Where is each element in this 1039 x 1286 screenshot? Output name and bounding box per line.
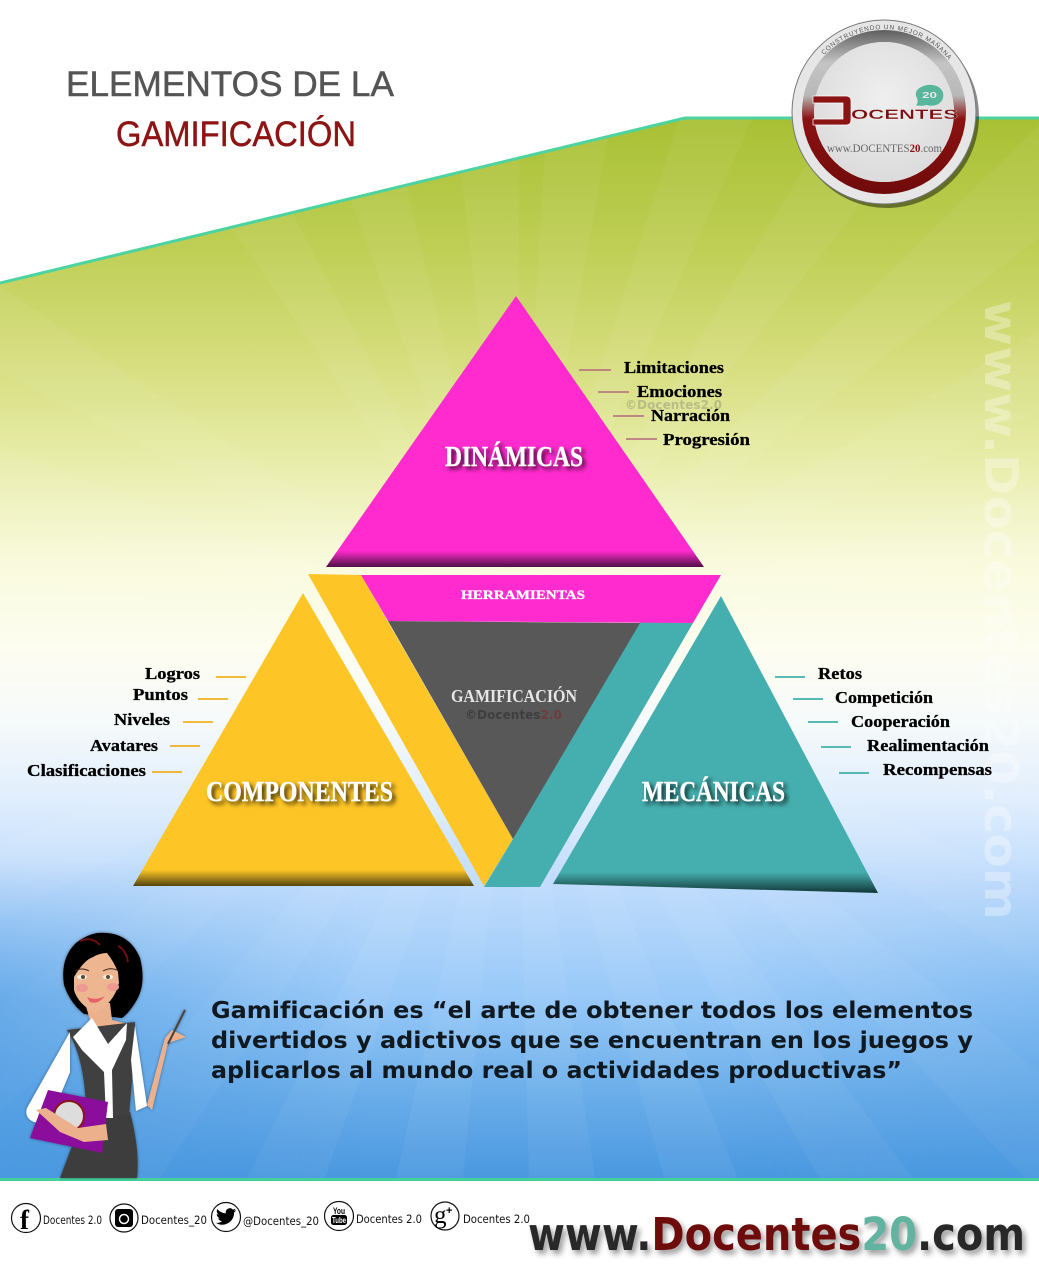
dinámicas list: ©Docentes2.0 — [625, 398, 722, 412]
social: youtube — [324, 1202, 422, 1230]
social: youtube: Tube — [332, 1216, 346, 1225]
social: twitter: @Docentes_20 — [243, 1214, 319, 1228]
social: google plus — [431, 1202, 530, 1230]
componentes list: Clasificaciones — [27, 761, 146, 780]
mecánicas list: Realimentación — [867, 736, 990, 755]
dinámicas list: Progresión — [663, 430, 751, 449]
dinámicas list — [579, 358, 751, 449]
social: instagram — [110, 1204, 207, 1232]
quote text: Gamificación es “el arte de obtener todos los elementos — [211, 996, 973, 1024]
logo badge: www.DOCENTES20.com — [827, 143, 942, 155]
social: facebook: Docentes 2.0 — [43, 1213, 102, 1227]
componentes list: Puntos — [133, 685, 188, 704]
logo badge: CONSTRUYENDO UN MEJOR MAÑANA — [822, 24, 951, 60]
logo badge — [792, 20, 979, 208]
componentes list — [27, 664, 246, 780]
title: GAMIFICACIÓN — [116, 115, 356, 154]
dinámicas list: Emociones — [637, 382, 722, 401]
componentes list: Avatares — [90, 736, 158, 755]
social: youtube: Docentes 2.0 — [356, 1212, 422, 1226]
label: mecánicas: MECÁNICAS — [642, 775, 785, 808]
mecánicas list: Cooperación — [851, 712, 951, 731]
watermark: docentes: ©Docentes2.0 — [465, 708, 562, 722]
social: google plus: Docentes 2.0 — [463, 1212, 530, 1226]
title — [66, 65, 395, 154]
panel: mecánicas triangle — [553, 596, 878, 893]
social: instagram: Docentes_20 — [141, 1213, 207, 1227]
social: facebook — [12, 1204, 102, 1235]
website url: www.Docentes20.com — [528, 1208, 1025, 1261]
componentes list: Niveles — [114, 710, 170, 729]
dinámicas list: Narración — [651, 406, 731, 425]
label: dinámicas: DINÁMICAS — [445, 440, 583, 473]
quote text: aplicarlos al mundo real o actividades productivas” — [211, 1056, 902, 1084]
quote text: divertidos y adictivos que se encuentran en los juegos y — [211, 1026, 973, 1054]
social: facebook: f — [20, 1205, 30, 1235]
watermark url: www.Docentes20.com — [974, 300, 1028, 920]
mecánicas list: Retos — [818, 664, 862, 683]
mecánicas list — [775, 664, 992, 779]
mecánicas list: Recompensas — [883, 760, 992, 779]
label: herramientas: HERRAMIENTAS — [461, 587, 585, 602]
label: componentes: COMPONENTES — [206, 776, 393, 808]
logo badge: OCENTES — [851, 106, 958, 122]
social: twitter — [212, 1202, 319, 1232]
illustration: teacher — [26, 933, 186, 1178]
social: youtube: You — [333, 1206, 345, 1216]
title: ELEMENTOS DE LA — [66, 65, 395, 104]
dinámicas list: Limitaciones — [624, 358, 724, 377]
panel: central inverted triangle — [308, 574, 721, 887]
social: google plus: g — [434, 1202, 447, 1229]
label: gamificación: GAMIFICACIÓN — [451, 685, 577, 706]
panel: dinámicas triangle — [326, 296, 704, 567]
logo badge: 20 — [922, 91, 938, 100]
quote text — [211, 996, 973, 1084]
mecánicas list: Competición — [835, 688, 934, 707]
panel: componentes triangle — [133, 593, 474, 886]
componentes list: Logros — [145, 664, 200, 683]
social: google plus: + — [446, 1205, 452, 1217]
